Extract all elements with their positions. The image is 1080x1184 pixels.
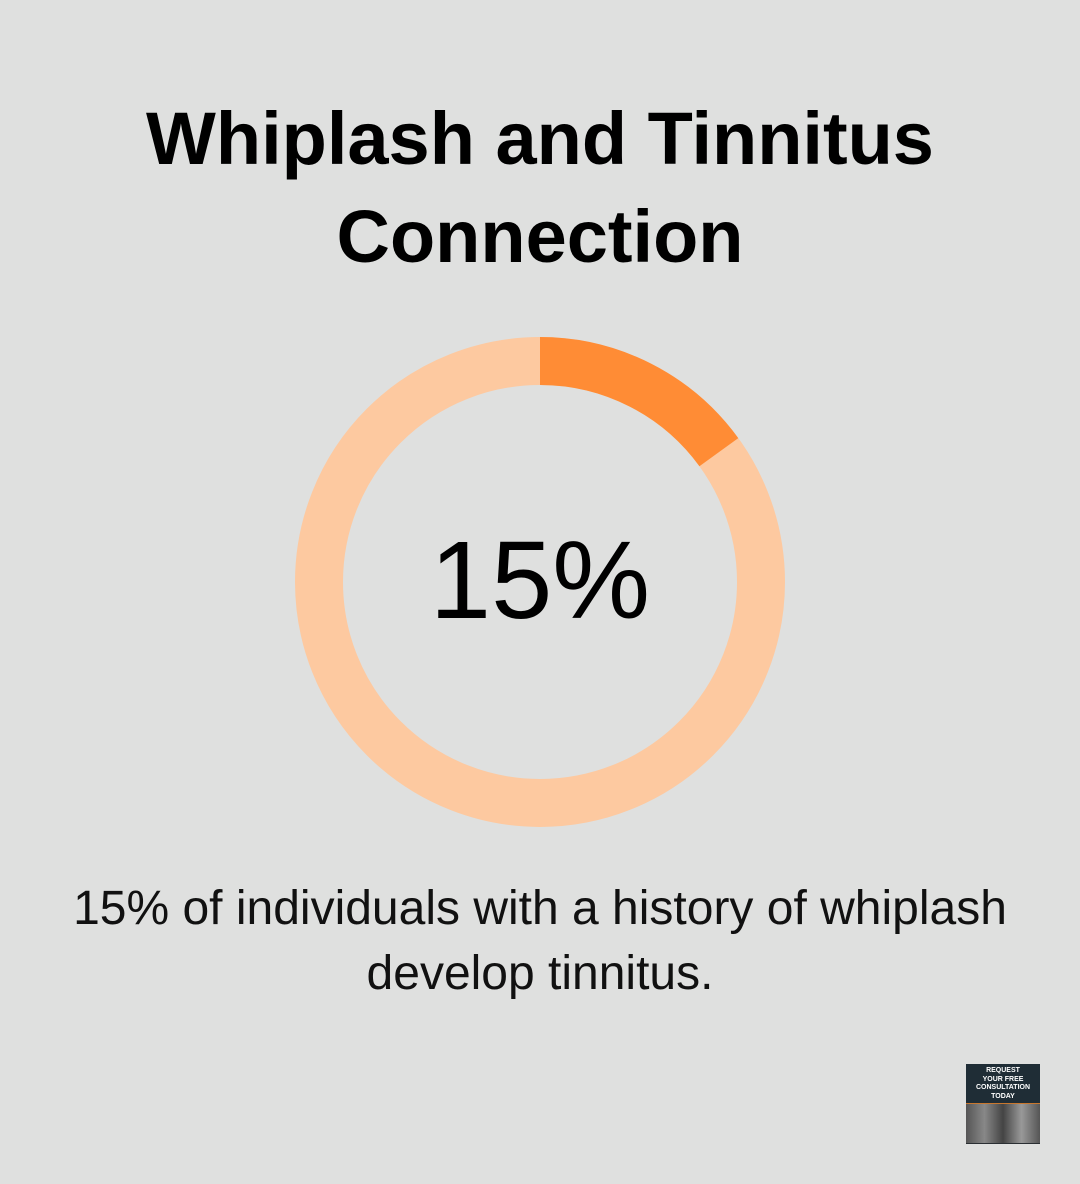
- logo: consultation badge: [966, 1064, 1040, 1144]
- logo: consultation badge: TODAY: [991, 1092, 1015, 1100]
- title: Whiplash and Tinnitus: [146, 97, 934, 180]
- logo: consultation badge: YOUR FREE: [983, 1076, 1023, 1082]
- center percentage: 15%: [430, 519, 650, 642]
- title: Connection: [337, 195, 743, 278]
- donut track: [319, 361, 761, 803]
- description: [73, 882, 1007, 1000]
- description: develop tinnitus.: [367, 947, 713, 1000]
- logo: consultation badge: CONSULTATION: [976, 1084, 1030, 1091]
- donut value 15%: [319, 361, 761, 803]
- logo: consultation badge: REQUEST: [986, 1067, 1020, 1074]
- description: 15% of individuals with a history of whiplash: [73, 882, 1007, 935]
- title: [146, 97, 934, 278]
